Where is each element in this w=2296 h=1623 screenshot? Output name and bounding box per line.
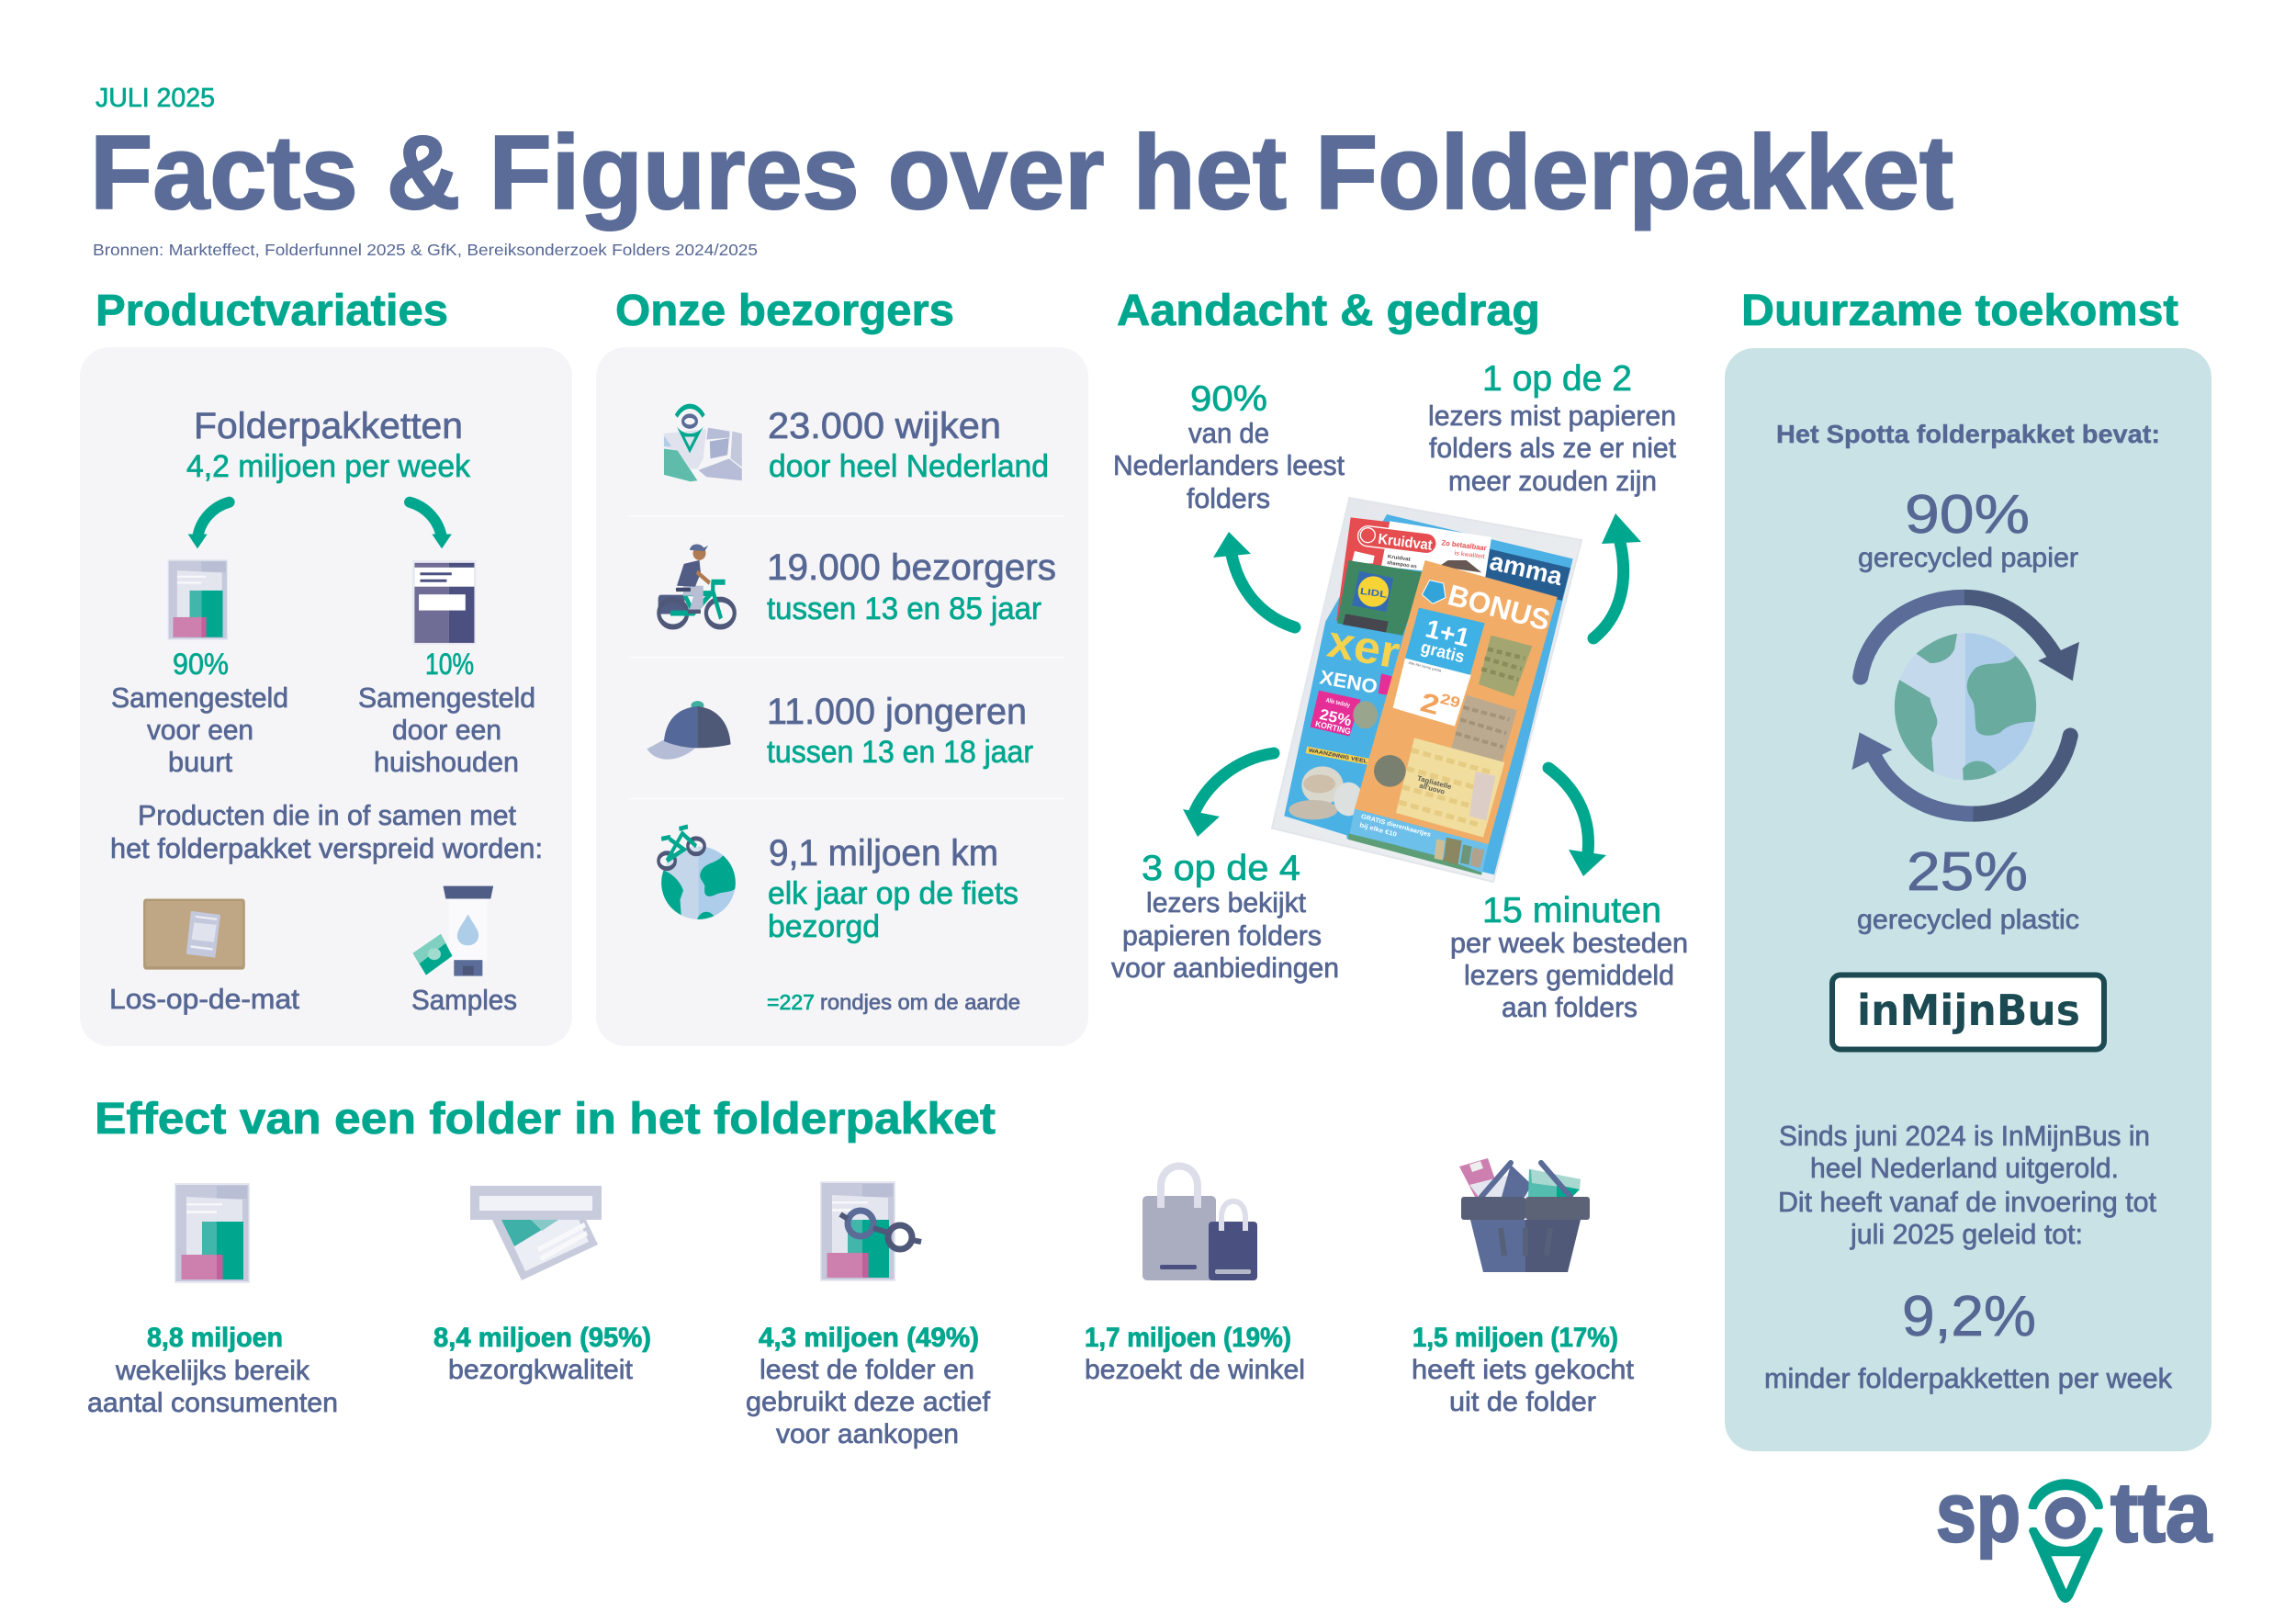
callout: 1 op de 2 [1428,359,1677,497]
icon: folder pack for neighbourhood [167,559,228,640]
note: rondjes om de aarde: =227 [767,990,815,1014]
text: gekocht: 1,5 miljoen (17%) [1412,1323,1618,1353]
icon: folder pack reach [174,1183,250,1283]
Lidl flyer: LIDL [1359,587,1388,601]
text: bereik: 8,8 miljoen [147,1323,283,1353]
text: bereik: wekelijks bereik [115,1356,310,1386]
Kruidvat flyer: is kwaliteit [1454,550,1485,560]
text: jongeren: 11.000 jongeren [767,692,1027,732]
text: gekocht: uit de folder [1449,1387,1596,1417]
text: bezorgkwaliteit: bezorgkwaliteit [448,1355,633,1385]
callout: 15 minuten: 15 minuten [1482,891,1661,930]
Kruidvat flyer: shampoo en [1387,560,1417,570]
text: gebruikt: 4,3 miljoen (49%) [759,1323,979,1353]
90 percent text [111,648,288,778]
text: bereik: aantal consumenten [87,1388,338,1418]
icon: shopping bags [1142,1167,1257,1280]
icon: household pack [412,560,476,645]
InMijnBus text: Sinds juni 2024 is InMijnBus in [1779,1121,2150,1152]
Xenos flyer: KORTING [1314,719,1352,736]
plastic bag overlay [1272,498,1581,882]
sources: Bronnen: Markteffect, Folderfunnel 2025 & GfK, Bereiksonderzoek Folders 2024/2025 [93,241,758,259]
Xenos flyer: XENO [1318,666,1379,698]
arrow right [410,502,452,548]
text: jongeren [767,692,1033,770]
Xenos flyer: xer [1323,616,1403,678]
arrow: top left [1213,532,1295,627]
callout: 1 op de 2: 1 op de 2 [1482,359,1632,399]
10 percent text: door een [392,715,501,746]
Kruidvat flyer: Kruidvat [1387,554,1411,563]
90 percent text: 90% [173,648,229,681]
callout: 3 op de 4 [1111,849,1339,984]
text: bezorgkwaliteit: 8,4 miljoen (95%) [433,1323,651,1353]
heading: Aandacht & gedrag: Aandacht & gedrag [1117,287,1540,335]
stat: 90% paper: 90% [1905,484,2030,545]
text: wijken [768,406,1049,484]
Gamma flyer band: amma [1487,547,1566,591]
90 percent text: voor een [147,715,253,746]
InMijnBus text: Dit heeft vanaf de invoering tot [1778,1187,2157,1218]
stat: 90% paper: gerecycled papier [1858,543,2078,573]
icon: basket [1459,1158,1590,1272]
text: gebruikt: voor aankopen [776,1419,959,1449]
panel: Onze bezorgers [596,347,1088,1046]
InMijnBus text: heel Nederland uitgerold. [1810,1153,2119,1184]
Albert Heijn bonus flyer: BONUS [1445,578,1554,637]
callout: 3 op de 4: papieren folders [1122,920,1322,952]
10 percent text: huishouden [374,747,519,778]
Albert Heijn bonus flyer: 1+1 [1423,614,1473,652]
icon: cap [647,701,731,760]
folder package image [1272,498,1581,882]
callout: 15 minuten [1450,891,1688,1023]
Folderpakketten heading: Folderpakketten [194,406,463,446]
text: gebruikt [746,1323,991,1449]
text: miljoen km: elk jaar op de fiets [768,876,1019,911]
heading: Productvariaties: Productvariaties [96,287,448,335]
blue back flyer [1325,514,1573,875]
heading: Duurzame toekomst: Duurzame toekomst [1741,287,2178,335]
title: Facts & Figures over het Folderpakket [90,115,1953,231]
Albert Heijn bonus flyer: all'uovo [1418,782,1446,796]
callout: 90%: 90% [1190,379,1267,419]
Albert Heijn bonus flyer: GRATIS dierenkaartjes [1360,814,1432,839]
text: wijken: door heel Nederland [769,449,1049,484]
text: jongeren: tussen 13 en 18 jaar [767,735,1033,770]
text: winkel: 1,7 miljoen (19%) [1085,1323,1291,1353]
Kruidvat flyer [1336,517,1491,622]
callout: 1 op de 2: meer zouden zijn [1448,466,1657,497]
text: miljoen km: 9,1 miljoen km [769,833,998,873]
InMijnBus text: juli 2025 geleid tot: [1850,1219,2083,1250]
90 percent text: Samengesteld [111,682,288,714]
logo: spotta [1936,1466,2212,1603]
callout: 90%: folders [1187,483,1270,514]
callout: 90%: Nederlanders leest [1113,450,1345,481]
Albert Heijn bonus flyer: 2 [1417,687,1443,721]
label: Samples: Samples [411,985,517,1016]
note: rondjes om de aarde: rondjes om de aarde [820,990,1020,1014]
Albert Heijn bonus flyer: Tagliatelle [1416,774,1453,791]
heading: Onze bezorgers: Onze bezorgers [615,287,954,335]
icon: doormat [143,899,245,970]
Xenos flyer: WAANZINNIG VEEL [1308,748,1368,765]
Albert Heijn bonus flyer: bij elke €10 [1358,822,1398,839]
callout: 3 op de 4: voor aanbiedingen [1111,952,1339,984]
stat: 25% plastic: gerecycled plastic [1857,905,2079,935]
products intro: het folderpakket verspreid worden: [110,833,543,864]
products intro: Producten die in of samen met [138,800,517,831]
arrow: bottom left [1183,753,1274,837]
Xenos flyer: 25% [1318,705,1354,729]
callout: 90%: van de [1188,418,1269,449]
Albert Heijn bonus flyer: Alle AH Verse pasta [1408,660,1443,673]
10 percent text: 10% [425,648,474,681]
Albert Heijn bonus flyer: gratis [1419,637,1467,667]
text: gekocht [1412,1323,1634,1417]
text: bezorgkwaliteit [433,1323,651,1385]
callout: 90% [1113,379,1345,514]
Lidl flyer [1337,560,1425,637]
products intro [110,800,543,864]
90 percent text: buurt [168,747,233,778]
callout: 3 op de 4: 3 op de 4 [1142,849,1300,888]
text: bezorgers: 19.000 bezorgers [767,547,1056,588]
arrow left [188,502,230,548]
logo: inMijnBus: inMijnBus [1857,986,2080,1035]
text: gekocht: heeft iets gekocht [1412,1355,1634,1385]
callout: 1 op de 2: lezers mist papieren [1428,400,1676,432]
pack contents heading: Het Spotta folderpakket bevat: [1776,420,2160,448]
10 percent text: Samengesteld [358,682,535,714]
text: bezorgers [767,547,1056,626]
Albert Heijn bonus flyer: 29 [1438,692,1462,711]
icon: globe with bicycle [658,827,737,922]
icon: cyclist [658,545,735,626]
arrow: bottom right [1548,768,1606,876]
icon: map with pin [664,406,742,481]
10 percent text [358,648,535,778]
text: miljoen km [768,833,1019,944]
arrow: top right [1593,513,1641,638]
stat: 9,2% fewer packages [1764,1285,2173,1394]
callout: 15 minuten: lezers gemiddeld [1464,960,1674,991]
Albert Heijn bonus flyer [1348,560,1558,875]
icon: pack with glasses [820,1181,921,1281]
text: wijken: 23.000 wijken [768,406,1001,446]
callout: 15 minuten: aan folders [1502,992,1638,1023]
text: gebruikt: gebruikt deze actief [746,1387,991,1417]
text: winkel: bezoekt de winkel [1085,1355,1305,1385]
text: winkel [1085,1323,1305,1385]
icon: samples [413,886,493,976]
panel: Duurzame toekomst [1725,348,2212,1451]
icon: globe with recycle arrows [1851,597,2079,814]
text: bezorgers: tussen 13 en 85 jaar [767,592,1041,626]
logo: spotta: sp [1936,1466,2020,1560]
stat: 9,2% fewer packages: minder folderpakketten per week [1764,1363,2173,1394]
stat: 90% paper [1858,484,2078,573]
stat: 25% plastic: 25% [1907,841,2028,902]
Kruidvat flyer: Kruidvat [1378,532,1434,554]
Xenos flyer: Alle tedoly [1325,697,1351,709]
text: miljoen km: bezorgd [768,909,880,944]
stat: 25% plastic [1857,841,2079,935]
volume per week: 4,2 miljoen per week [186,449,471,484]
stat: 9,2% fewer packages: 9,2% [1902,1285,2036,1348]
callout: 3 op de 4: lezers bekijkt [1146,887,1307,919]
Xenos flyer [1284,616,1405,836]
icon: letterbox [470,1186,602,1280]
text: gebruikt: leest de folder en [760,1355,974,1385]
text: bereik [87,1323,338,1418]
callout: 15 minuten: per week besteden [1450,928,1688,959]
logo: inMijnBus [1832,975,2104,1049]
label: Los-op-de-mat: Los-op-de-mat [109,984,300,1015]
logo: spotta: tta [2110,1466,2212,1560]
panel: Productvariaties [80,347,572,1046]
callout: 1 op de 2: folders als ze er niet [1429,433,1677,464]
Kruidvat flyer: Zo betaalbaar [1441,538,1487,552]
heading: Effect: Effect van een folder in het folderpakket [95,1095,996,1144]
date label: JULI 2025 [96,84,215,113]
InMijnBus text [1778,1121,2157,1250]
